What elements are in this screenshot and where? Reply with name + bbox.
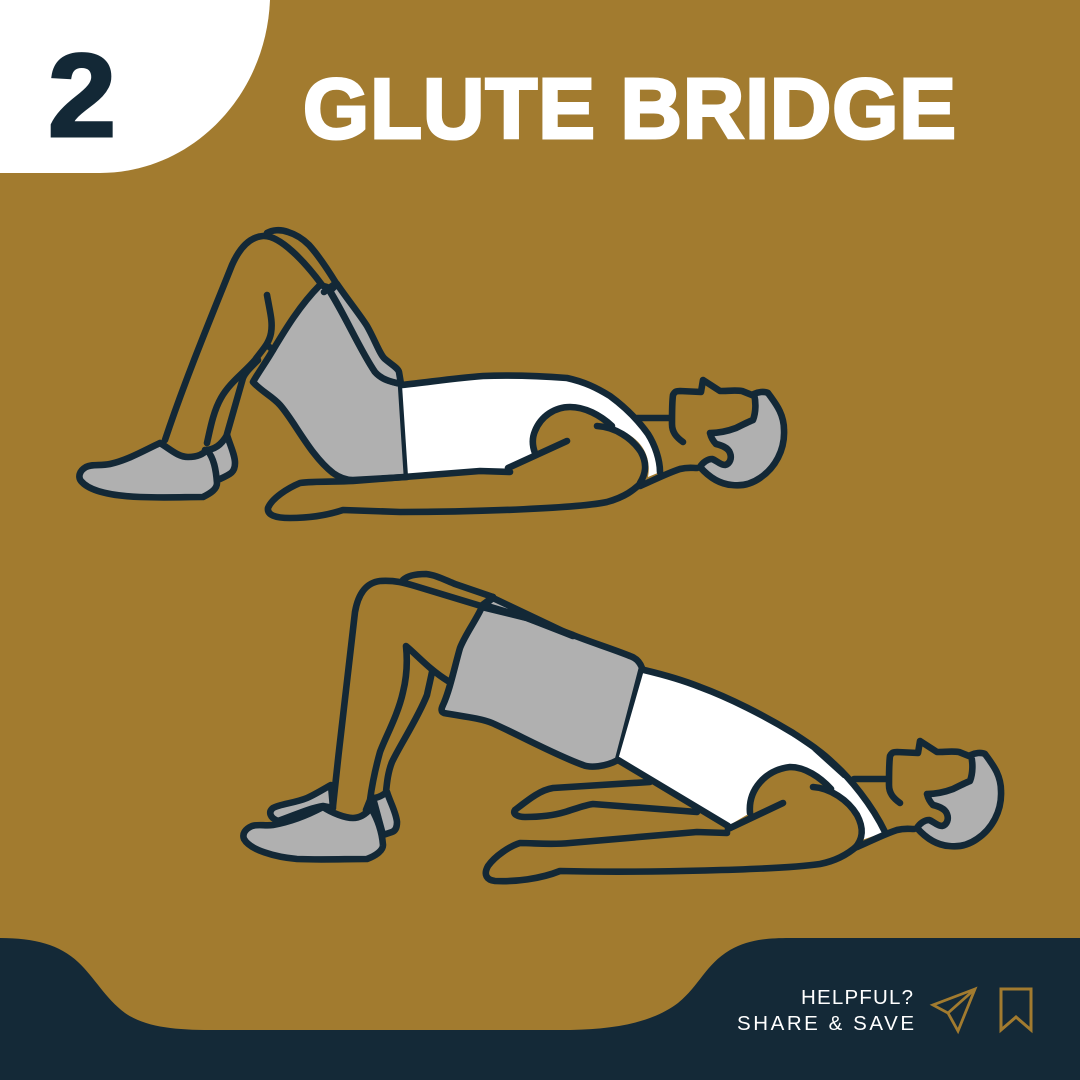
shoulder	[597, 426, 645, 483]
shoe near foot	[79, 443, 217, 497]
far calf lines	[207, 295, 272, 443]
far shoe	[270, 785, 333, 821]
hair	[700, 392, 784, 485]
back of knee	[366, 646, 448, 810]
call to action text: SHARE & SAVE	[737, 1012, 914, 1035]
near leg	[165, 236, 322, 440]
shoulder	[813, 787, 862, 848]
neck	[637, 415, 670, 421]
arm outline	[268, 471, 642, 518]
near arm outline	[486, 832, 857, 881]
far arm	[514, 782, 697, 817]
shorts	[442, 607, 642, 767]
shorts far strip	[484, 598, 573, 636]
head and neck (same as resting figure, translated)	[854, 741, 1001, 847]
dark wedge on back	[812, 750, 853, 779]
call to action text: HELPFUL?	[801, 986, 913, 1009]
far knee strip	[267, 230, 336, 283]
near shoe	[243, 807, 383, 859]
icon: bookmark	[1001, 989, 1031, 1030]
shorts	[253, 285, 407, 480]
badge: white corner with number: 2	[48, 30, 116, 162]
call to action text	[737, 986, 914, 1035]
figure: resting position, lying on back with knees bent	[79, 230, 784, 518]
shirt outline	[402, 376, 660, 472]
forearm line on chest	[508, 441, 567, 468]
shirt fill	[402, 376, 660, 477]
armpit arc	[533, 407, 612, 453]
far sock	[373, 792, 397, 835]
shirt fill	[618, 670, 885, 840]
footer wave band	[0, 938, 1080, 1080]
icon: paper plane	[933, 989, 975, 1031]
badge: white corner with number	[0, 0, 270, 173]
armpit arc	[750, 767, 831, 813]
sock far foot	[205, 435, 235, 479]
title: GLUTE BRIDGE	[303, 62, 956, 157]
near leg	[333, 581, 481, 806]
figure: raised position, hips lifted into bridge	[243, 574, 1001, 881]
face	[672, 380, 752, 442]
shirt outline	[618, 670, 885, 832]
forearm line	[728, 803, 783, 829]
far calf	[386, 672, 432, 792]
far knee strip	[403, 574, 493, 597]
shorts far leg strip	[330, 284, 401, 384]
